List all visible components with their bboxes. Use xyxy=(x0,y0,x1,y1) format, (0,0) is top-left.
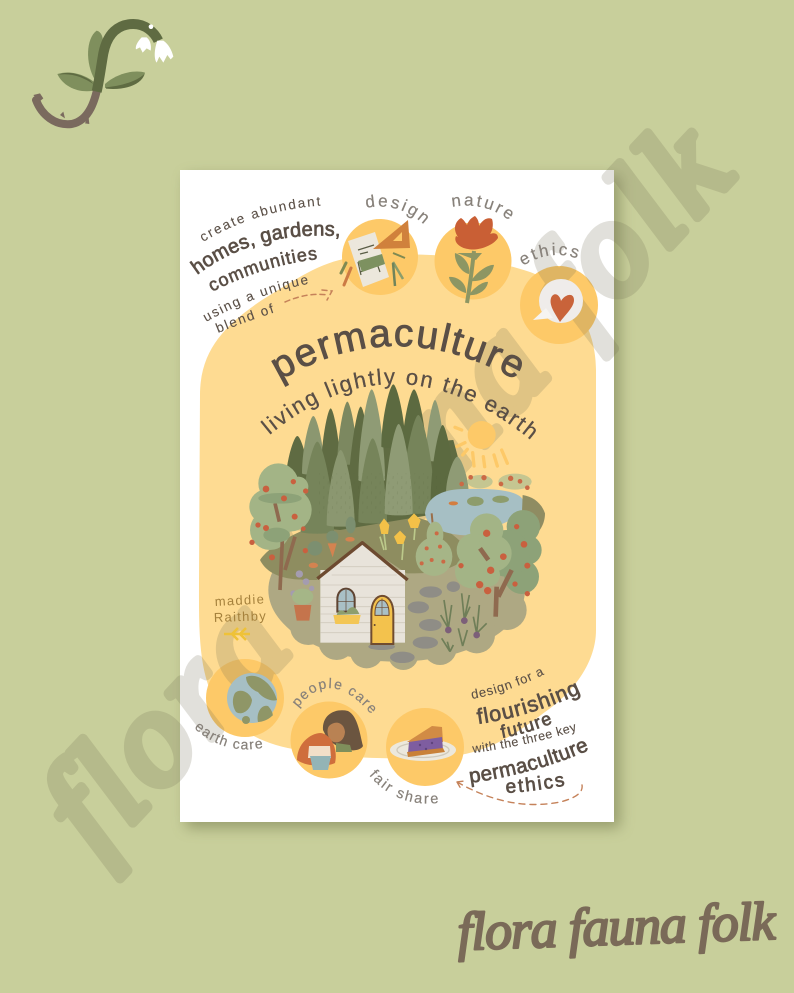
text: maddie raithby: maddie xyxy=(214,591,266,609)
watermark: flora fauna folk xyxy=(11,94,759,880)
left apple tree xyxy=(249,463,312,590)
text: future: future xyxy=(500,715,552,738)
climbing plant xyxy=(416,513,452,576)
label: people care: people care xyxy=(292,678,376,713)
panel: poster sheet xyxy=(180,170,614,822)
onions xyxy=(441,593,487,652)
text: create abundant: create abundant xyxy=(201,197,321,241)
text: with the three key: with the three key xyxy=(472,724,576,753)
ground xyxy=(268,518,527,670)
text: maddie raithby xyxy=(214,591,267,625)
label: design: design xyxy=(366,194,428,224)
text: using a unique: using a unique xyxy=(203,277,308,322)
icon: design xyxy=(341,220,410,287)
panel: yellow blob xyxy=(199,255,596,758)
text: maddie raithby: Raithby xyxy=(214,608,267,625)
sun xyxy=(455,421,507,467)
reeds xyxy=(522,495,545,537)
flower border xyxy=(459,474,532,490)
poster shadow xyxy=(186,176,620,828)
house xyxy=(317,543,408,644)
right apple tree xyxy=(455,510,542,617)
dark ground xyxy=(260,513,470,580)
illustration: circle backgrounds xyxy=(206,219,598,786)
carrots xyxy=(308,517,356,568)
pond xyxy=(425,489,524,535)
text: permaculture: permaculture xyxy=(469,741,588,788)
icon: earth xyxy=(227,673,277,724)
text: design for a: design for a xyxy=(472,669,544,699)
icon: pie xyxy=(390,726,456,761)
label: ethics: ethics xyxy=(520,242,579,264)
label: nature: nature xyxy=(452,196,512,219)
forest xyxy=(286,384,469,534)
text: flourishing: flourishing xyxy=(476,683,581,724)
icon: wheat xyxy=(224,628,250,640)
label: fair share: fair share xyxy=(370,770,438,804)
text: blend of: blend of xyxy=(215,303,274,333)
text: ethics: ethics xyxy=(506,776,564,794)
brand wordmark: flora fauna folk xyxy=(456,891,777,962)
tulips xyxy=(379,513,421,560)
text: communities: communities xyxy=(210,249,317,291)
icon: people xyxy=(297,710,363,770)
icon: flower xyxy=(449,216,498,303)
text: homes, gardens: homes, gardens, xyxy=(189,222,339,274)
subtitle: living lightly on the earth xyxy=(260,368,536,440)
label: earth care: earth care xyxy=(196,724,262,750)
lily pads and fish xyxy=(449,496,509,506)
title: permaculture xyxy=(271,322,522,387)
arrow: to fair share xyxy=(457,781,582,804)
illustration: homestead scene xyxy=(249,384,545,670)
icon: speech heart xyxy=(533,279,583,323)
arrow: to design xyxy=(285,290,332,302)
stepping stones xyxy=(368,581,460,663)
flower pot xyxy=(290,570,314,621)
logo: f with snowdrops xyxy=(33,24,173,124)
